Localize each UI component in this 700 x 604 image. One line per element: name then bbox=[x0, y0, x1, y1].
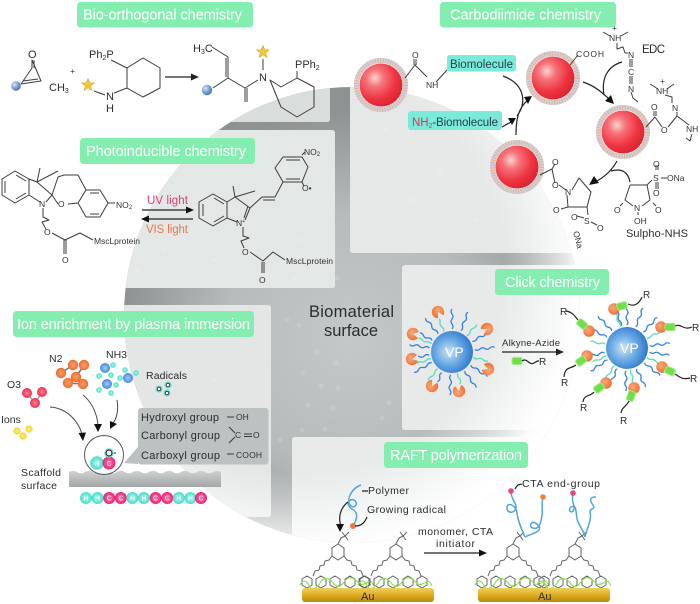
molecule: phosphine amine: H bbox=[106, 103, 114, 115]
sphere: EDC intermediate: NH bbox=[686, 124, 698, 134]
molecule: merocyanine: O• bbox=[302, 183, 312, 193]
magnified lens: C bbox=[106, 461, 112, 468]
grown polymers with CTA end-group: CTA end-group bbox=[522, 478, 600, 490]
reaction: photoinducible bbox=[2, 147, 333, 285]
molecule: cyclopropenone bbox=[11, 49, 75, 95]
molecule: EDC: + bbox=[612, 23, 617, 33]
polymer and radical bbox=[336, 485, 446, 532]
scaffold surface bbox=[21, 467, 221, 492]
biomaterial surface sphere bbox=[124, 87, 580, 543]
substrate right with dendrimers bbox=[475, 532, 611, 603]
center label: Biomaterial surface bbox=[309, 303, 394, 340]
atom chain: H bbox=[176, 496, 181, 502]
arrows: gases to surface bbox=[50, 395, 118, 441]
sphere: biomolecule conjugate bbox=[356, 50, 447, 110]
text and arrows: UV / VIS light bbox=[141, 195, 194, 236]
heading: Ion enrichment by plasma immersion: Ion enrichment by plasma immersion bbox=[17, 317, 250, 333]
virus particle: left bbox=[405, 304, 496, 398]
molecule: spiropyran: 2 bbox=[129, 205, 133, 211]
callout: functional groups: C bbox=[235, 430, 241, 440]
molecule: cyclopropenone: O bbox=[28, 49, 37, 61]
atom chain: H bbox=[95, 496, 100, 502]
molecule: phosphine amine bbox=[82, 49, 160, 115]
atom chain: C bbox=[165, 496, 170, 502]
virus particle: right bbox=[560, 290, 699, 427]
virus particle: right: R bbox=[561, 378, 568, 389]
atom chain: C bbox=[118, 496, 123, 502]
substrate left with dendrimers: Au bbox=[361, 591, 374, 603]
atom chain bbox=[80, 492, 207, 504]
molecule: Sulpho-NHS: O bbox=[653, 159, 660, 169]
sphere: sulpho-NHS ester: O bbox=[571, 212, 578, 222]
label: NH2-Biomolecule: NH bbox=[412, 117, 432, 130]
sphere: sulpho-NHS ester: O bbox=[553, 205, 560, 215]
sphere: EDC intermediate: + bbox=[660, 76, 665, 86]
virus particle: right: R bbox=[580, 403, 587, 414]
molecule: merocyanine: MscLprotein bbox=[286, 256, 333, 266]
sphere: EDC intermediate: O bbox=[661, 125, 668, 135]
sphere: biomolecule conjugate: O bbox=[412, 50, 419, 60]
arrow: Alkyne-Azide: Alkyne-Azide bbox=[502, 338, 560, 349]
panel: click background bbox=[402, 265, 580, 430]
virus particle: right: R bbox=[690, 374, 697, 385]
molecule: spiropyran: O bbox=[44, 227, 51, 237]
heading: RAFT polymerization bbox=[384, 442, 528, 468]
heading: Photoinducible chemistry: Photoinducible chemistry bbox=[86, 144, 247, 160]
scaffold surface: surface bbox=[21, 480, 57, 492]
molecule: cyclopropenone: + bbox=[70, 66, 75, 76]
reaction: carbodiimide bbox=[356, 23, 698, 250]
arrows: carbodiimide cycle bbox=[502, 62, 630, 185]
molecule: Sulpho-NHS: N bbox=[634, 203, 640, 213]
callout: functional groups: Carbonyl group bbox=[141, 430, 220, 442]
polymer and radical: Polymer bbox=[368, 485, 410, 497]
text and arrows: UV / VIS light: UV light bbox=[147, 195, 189, 207]
arrow: Alkyne-Azide: R bbox=[539, 357, 546, 368]
molecule: merocyanine bbox=[199, 147, 333, 285]
atom chain: H bbox=[188, 496, 193, 502]
gas: NH3: NH3 bbox=[106, 349, 127, 361]
callout: functional groups: O bbox=[253, 430, 260, 440]
molecule: Sulpho-NHS bbox=[614, 159, 688, 240]
sphere: sulpho-NHS ester: O bbox=[552, 157, 559, 167]
virus particle: right: R bbox=[643, 290, 650, 301]
atom chain: C bbox=[153, 496, 158, 502]
callout: functional groups: OH bbox=[236, 412, 249, 422]
virus particle: right: R bbox=[560, 307, 567, 318]
virus particle: right: R bbox=[692, 323, 699, 334]
atom chain: C bbox=[107, 496, 112, 502]
panel: photoinducible background bbox=[126, 130, 335, 288]
text and arrows: UV / VIS light: VIS light bbox=[146, 224, 189, 236]
atom chain: H bbox=[130, 496, 135, 502]
atom chain: H bbox=[142, 496, 147, 502]
RAFT polymerization diagram bbox=[300, 478, 611, 603]
sphere: EDC intermediate: N bbox=[672, 103, 678, 113]
molecule: spiropyran: N bbox=[39, 199, 45, 209]
label: NH2-Biomolecule: -Biomolecule bbox=[432, 117, 498, 129]
molecule: product: H bbox=[193, 43, 201, 55]
molecule: spiropyran: O bbox=[62, 255, 69, 265]
molecule: EDC: N bbox=[628, 84, 634, 94]
substrate right with dendrimers: Au bbox=[538, 591, 551, 603]
soft white edge fade bbox=[180, 130, 580, 543]
molecule: product bbox=[193, 43, 320, 117]
bokeh dots bbox=[278, 276, 384, 442]
callout: functional groups: COOH bbox=[236, 450, 262, 460]
center label: Biomaterial surface: surface bbox=[324, 322, 378, 340]
callout: functional groups bbox=[138, 408, 268, 464]
heading: Ion enrichment by plasma immersion bbox=[13, 311, 254, 337]
sphere: sulpho-NHS ester: ONa bbox=[571, 230, 585, 250]
heading: Bio-orthogonal chemistry bbox=[77, 2, 253, 28]
molecule: spiropyran: O bbox=[58, 199, 65, 209]
molecule: product: C bbox=[205, 43, 213, 55]
molecule: EDC: C bbox=[628, 67, 634, 77]
molecule: Sulpho-NHS: O bbox=[653, 188, 660, 198]
heading: RAFT polymerization: RAFT polymerization bbox=[390, 448, 522, 464]
virus particle: left: VP bbox=[445, 344, 464, 360]
grown polymers with CTA end-group bbox=[507, 478, 600, 537]
molecule: merocyanine: O bbox=[242, 247, 249, 257]
molecule: spiropyran bbox=[2, 168, 140, 265]
sphere: sulpho-NHS ester: N bbox=[565, 187, 571, 197]
molecule: merocyanine: N bbox=[236, 218, 242, 228]
magnified lens bbox=[84, 436, 138, 474]
molecule: spiropyran: MscLprotein bbox=[94, 236, 140, 246]
callout: functional groups: Hydroxyl group bbox=[141, 412, 219, 424]
heading: Click chemistry: Click chemistry bbox=[505, 275, 601, 291]
arrow: monomer, CTA initiator: initiator bbox=[436, 538, 476, 550]
magnified lens: H bbox=[94, 461, 100, 468]
sphere: EDC intermediate bbox=[598, 76, 698, 156]
molecule: phosphine amine: 2 bbox=[102, 55, 106, 62]
polymer and radical: Growing radical bbox=[367, 504, 446, 516]
reaction: bio-orthogonal bbox=[11, 43, 320, 117]
reaction: click chemistry bbox=[405, 290, 699, 427]
gas: N2 bbox=[49, 353, 89, 389]
scaffold surface: Scaffold bbox=[21, 467, 61, 479]
gas: N2: N2 bbox=[49, 353, 63, 365]
atom chain: H bbox=[84, 496, 89, 502]
center label: Biomaterial surface: Biomaterial bbox=[309, 303, 394, 321]
molecule: merocyanine: 2 bbox=[317, 152, 321, 158]
panel: ion background bbox=[124, 305, 271, 517]
sphere: biomolecule conjugate: NH bbox=[426, 80, 438, 90]
heading: Bio-orthogonal chemistry: Bio-orthogonal chemistry bbox=[83, 8, 243, 24]
arrow: Alkyne-Azide bbox=[502, 338, 564, 368]
molecule: Sulpho-NHS: Sulpho-NHS bbox=[626, 228, 688, 240]
molecule: phosphine amine: P bbox=[106, 49, 114, 61]
sphere: EDC intermediate: NH bbox=[656, 86, 668, 96]
gas: O3 bbox=[7, 379, 47, 408]
gas: radicals bbox=[146, 370, 187, 396]
molecule: product: N bbox=[259, 72, 267, 84]
substrate left with dendrimers bbox=[300, 532, 434, 603]
sphere: sulpho-NHS ester: O bbox=[597, 223, 604, 233]
gas: O3: O3 bbox=[7, 379, 21, 391]
gas: ions bbox=[1, 414, 33, 440]
sphere: sulpho-NHS ester bbox=[492, 142, 604, 250]
arrow: reaction bbox=[165, 74, 199, 80]
gas: NH3 bbox=[96, 349, 139, 396]
gas: ions: Ions bbox=[1, 414, 21, 426]
virus particle: right: VP bbox=[620, 340, 639, 356]
molecule: product: 2 bbox=[316, 65, 320, 72]
panel: carbodiimide background bbox=[350, 87, 572, 253]
virus particle: right: R bbox=[620, 416, 627, 427]
molecule: EDC: NH bbox=[609, 33, 621, 43]
molecule: EDC: EDC bbox=[642, 44, 665, 56]
molecule: spiropyran: NO bbox=[116, 200, 129, 210]
sphere: COOH bbox=[528, 49, 604, 102]
heading: Carbodiimide chemistry bbox=[440, 2, 616, 28]
molecule: phosphine amine: N bbox=[106, 91, 114, 103]
arrow: monomer, CTA initiator: monomer, CTA bbox=[418, 526, 493, 538]
molecule: EDC: N bbox=[628, 50, 634, 60]
molecule: merocyanine: NO bbox=[304, 147, 317, 157]
heading: Click chemistry bbox=[495, 269, 609, 295]
callout: functional groups: Carboxyl group bbox=[141, 450, 220, 462]
label: NH2-Biomolecule: 2 bbox=[428, 123, 432, 130]
molecule: EDC bbox=[603, 23, 665, 102]
molecule: Sulpho-NHS: ONa bbox=[667, 173, 685, 183]
label: NH2-Biomolecule bbox=[408, 111, 502, 130]
panel: RAFT background bbox=[292, 437, 544, 543]
atom chain: C bbox=[198, 496, 204, 502]
molecule: merocyanine: O bbox=[259, 275, 266, 285]
sphere: COOH: COOH bbox=[576, 49, 604, 59]
sphere: sulpho-NHS ester: S bbox=[584, 216, 590, 226]
label: Biomolecule: Biomolecule bbox=[450, 59, 513, 71]
sphere: EDC intermediate: O bbox=[651, 102, 658, 112]
molecule: Sulpho-NHS: O bbox=[614, 205, 621, 215]
molecule: Sulpho-NHS: S bbox=[653, 173, 659, 183]
molecule: merocyanine: + bbox=[242, 219, 245, 225]
heading: Carbodiimide chemistry: Carbodiimide chemistry bbox=[450, 8, 602, 24]
label: Biomolecule bbox=[447, 55, 516, 72]
molecule: cyclopropenone: 3 bbox=[65, 88, 69, 95]
gas: radicals: Radicals bbox=[146, 370, 187, 382]
molecule: product: 3 bbox=[201, 49, 205, 56]
molecule: Sulpho-NHS: O bbox=[655, 205, 662, 215]
sphere: sulpho-NHS ester: O bbox=[552, 180, 559, 190]
molecule: product: PPh bbox=[295, 59, 316, 71]
ion enrichment diagram bbox=[1, 349, 268, 504]
molecule: cyclopropenone: CH bbox=[49, 82, 65, 94]
heading: Photoinducible chemistry bbox=[80, 138, 255, 164]
molecule: Sulpho-NHS: OH bbox=[634, 216, 647, 226]
molecule: phosphine amine: Ph bbox=[89, 49, 102, 61]
arrow: monomer, CTA initiator bbox=[418, 526, 493, 556]
panel: bio-orthogonal background bbox=[231, 88, 330, 122]
